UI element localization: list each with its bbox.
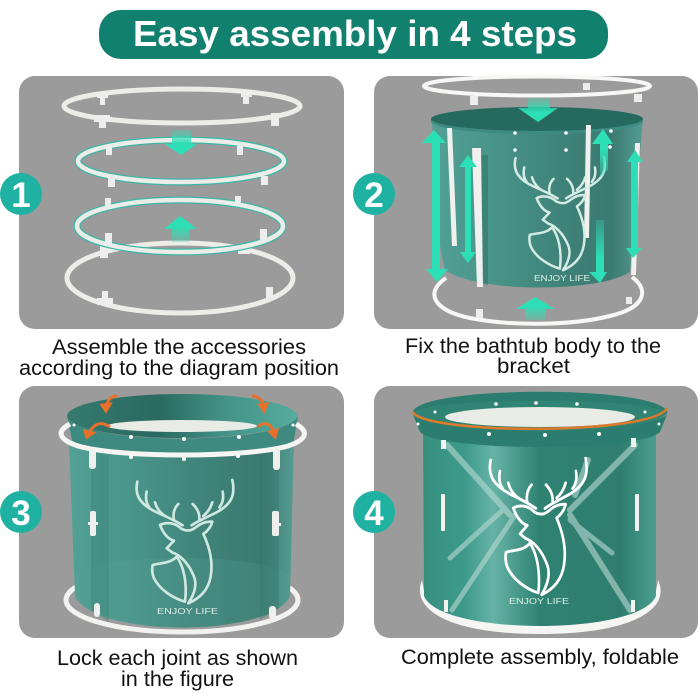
cross braces — [447, 445, 635, 610]
ring: top — [424, 76, 650, 105]
logo: deer — [490, 458, 587, 595]
step badge 3 — [0, 491, 42, 533]
panel: step 2 — [374, 76, 698, 329]
logo: deer — [137, 480, 233, 603]
arrows: orange — [85, 396, 277, 437]
caption: step 4: Complete assembly, foldable — [401, 645, 679, 669]
step badge 4: 4 — [364, 494, 384, 533]
bathtub body — [67, 394, 298, 628]
caption: step 1: according to the diagram position — [19, 356, 339, 380]
ring: top white — [64, 89, 300, 128]
brand text: ENJOY LIFE — [534, 273, 590, 283]
caption: step 3: in the figure — [121, 667, 234, 691]
base ring — [420, 580, 661, 634]
brand text: ENJOY LIFE — [157, 606, 218, 616]
arrow: bottom up — [516, 297, 555, 320]
step badge 1: 1 — [11, 176, 31, 215]
rods — [447, 125, 640, 287]
caption: step 1: Assemble the accessories — [52, 335, 306, 359]
panel: step 1 — [19, 76, 344, 329]
ring: lower teal — [77, 196, 283, 252]
bathtub body — [412, 392, 668, 626]
ring: top — [61, 424, 304, 455]
caption: step 3: Lock each joint as shown — [57, 646, 298, 670]
caption: step 3 — [57, 646, 298, 691]
ring: upper teal — [78, 140, 284, 187]
caption: step 1 — [19, 335, 339, 380]
panel: step 4 — [374, 386, 698, 638]
arrows: vertical — [422, 129, 643, 283]
bathtub body — [431, 107, 643, 288]
ring: bottom — [434, 277, 642, 324]
step badge 1 — [0, 173, 42, 215]
step badge 2 — [353, 173, 395, 215]
arrow: up — [164, 216, 197, 242]
title: Easy assembly in 4 steps — [133, 13, 577, 54]
caption: step 2 — [405, 334, 661, 378]
step badge 3: 3 — [11, 494, 31, 533]
clips — [88, 449, 281, 619]
caption: step 2: Fix the bathtub body to the — [405, 334, 661, 358]
panel: step 3 — [19, 386, 344, 638]
step badge 4 — [353, 491, 395, 533]
step badge 2: 2 — [364, 176, 384, 215]
brand text: ENJOY LIFE — [509, 596, 569, 606]
ring: bottom white — [67, 243, 293, 313]
logo: deer — [515, 157, 605, 270]
arrow: top down — [518, 98, 558, 122]
caption: step 2: bracket — [497, 354, 570, 378]
arrow: down — [165, 130, 197, 155]
clips — [441, 438, 639, 612]
ring: bottom — [66, 568, 298, 632]
